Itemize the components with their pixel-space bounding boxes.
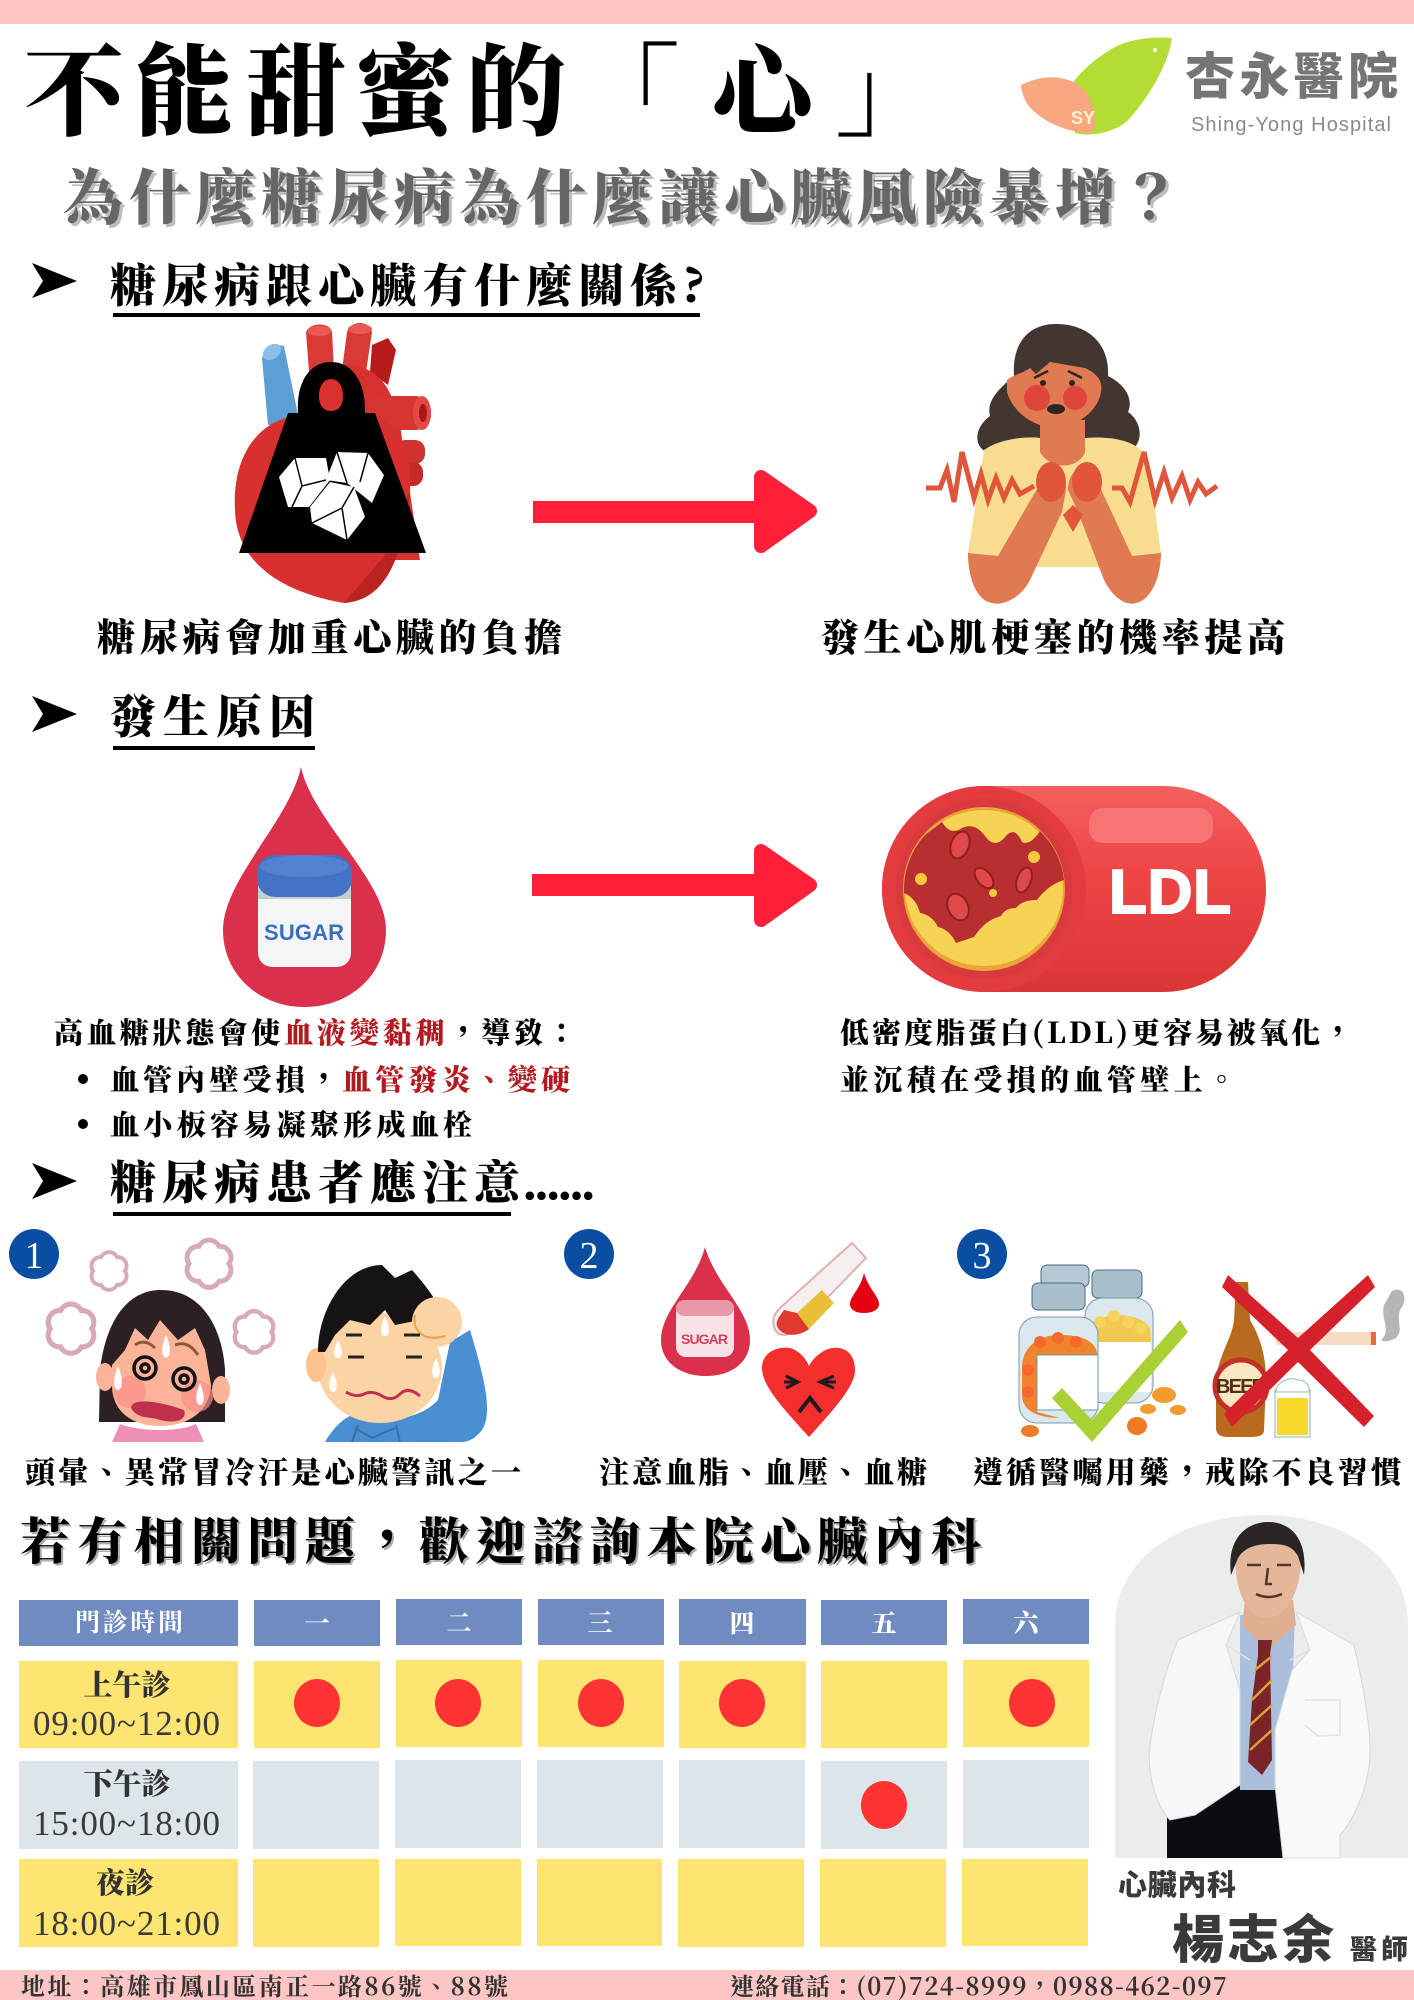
- number badge 1: 1: [24, 1235, 44, 1277]
- text block: high blood sugar: 血管內壁受損，血管發炎、變硬: [110, 1058, 570, 1099]
- logo: Shing-Yong Hospital: Shing-Yong Hospital: [1191, 114, 1391, 136]
- table header: 一: [304, 1604, 330, 1640]
- table header: 五: [871, 1604, 897, 1640]
- icon: no beer, no cigarette: BEER: [1216, 1376, 1267, 1398]
- subtitle with shadow: 為什麼糖尿病為什麼讓心臟風險暴增？: [63, 151, 1181, 237]
- weight: [298, 362, 365, 413]
- afternoon row: 15:00~18:00: [33, 1804, 220, 1843]
- evening row: [19, 1859, 1088, 1947]
- icon: heart with sugar weight: [235, 323, 431, 603]
- icon: blood drop with jar (small): [661, 1247, 750, 1376]
- trousers: [1167, 1780, 1340, 1858]
- morning row: [19, 1660, 1089, 1748]
- logo: Shing-Yong Hospital: [1021, 38, 1398, 136]
- caption 2: 注意血脂、血壓、血糖: [599, 1448, 927, 1492]
- text block: high blood sugar: [54, 1011, 576, 1144]
- text block: high blood sugar: 血小板容易凝聚形成血栓: [110, 1103, 472, 1144]
- icon: sweating boy: [306, 1265, 487, 1442]
- icon: woman with chest pain: [926, 324, 1217, 604]
- table header: 門診時間: [75, 1603, 183, 1639]
- clinic timetable: [19, 1599, 1089, 1947]
- section 3 heading: ......: [522, 1147, 596, 1213]
- table header: 二: [446, 1604, 472, 1640]
- number badge 2: [564, 1229, 614, 1279]
- text block: LDL: 並沉積在受損的血管壁上。: [840, 1058, 1236, 1099]
- section 1 heading: 糖尿病跟心臟有什麼關係?: [110, 250, 705, 316]
- table header: 六: [1013, 1604, 1041, 1640]
- footer band: [0, 1970, 1414, 2000]
- doctor department: 心臟內科: [1118, 1869, 1236, 1902]
- arrow 2: [532, 851, 810, 920]
- section 2 heading: 發生原因: [110, 681, 315, 747]
- icon: blood drop with sugar jar: SUGAR: [264, 920, 345, 945]
- table header: 四: [729, 1604, 755, 1640]
- icon: LDL artery: LDL: [1109, 858, 1231, 927]
- number badge 3: 3: [972, 1235, 992, 1277]
- morning row: 上午診: [83, 1663, 171, 1704]
- doctor photo panel: [1115, 1515, 1408, 1858]
- number badge 2: 2: [580, 1235, 598, 1277]
- icon: test tube: [773, 1243, 879, 1335]
- top pink band: [0, 0, 1414, 24]
- logo: Shing-Yong Hospital: SY: [1071, 108, 1095, 128]
- doctor title: 醫師: [1350, 1935, 1408, 1965]
- icon: LDL artery: [882, 786, 1266, 992]
- coat: [1149, 1612, 1240, 1820]
- neck and face: [1242, 1600, 1296, 1650]
- icon: no beer, no cigarette: [1215, 1275, 1404, 1437]
- icon: blood drop with jar (small): SUGAR: [681, 1331, 728, 1347]
- icon: unhappy heart: [762, 1348, 855, 1437]
- morning row: 09:00~12:00: [33, 1704, 220, 1743]
- arrow 1: [533, 477, 810, 546]
- section 2 heading: [32, 681, 315, 750]
- caption: heart attack risk: 發生心肌梗塞的機率提高: [821, 607, 1285, 662]
- section 3 heading: 糖尿病患者應注意: [110, 1147, 524, 1213]
- icon: blood drop with sugar jar: [223, 767, 386, 1007]
- logo: Shing-Yong Hospital: 杏永醫院: [1185, 49, 1398, 105]
- afternoon row: 下午診: [83, 1762, 171, 1803]
- icon: dizzy girl: [48, 1240, 273, 1442]
- text block: LDL: [840, 1011, 1352, 1099]
- section 3 heading: [32, 1147, 596, 1216]
- caption 1: 頭暈、異常冒冷汗是心臟警訊之一: [25, 1448, 521, 1492]
- caption: heart burden: 糖尿病會加重心臟的負擔: [97, 607, 562, 662]
- shirt: [1240, 1615, 1295, 1790]
- evening row: 18:00~21:00: [33, 1904, 220, 1943]
- text block: LDL: 低密度脂蛋白(LDL)更容易被氧化，: [840, 1011, 1352, 1052]
- doctor name: 楊志余: [1172, 1912, 1334, 1970]
- tie: [1248, 1640, 1272, 1775]
- icon: medicine bottles with check: [1019, 1265, 1188, 1442]
- caption 3: 遵循醫囑用藥，戒除不良習慣: [973, 1448, 1406, 1492]
- consultation heading: 若有相關問題，歡迎諮詢本院心臟內科: [20, 1502, 981, 1574]
- number badge 1: [9, 1229, 59, 1279]
- table header: [19, 1599, 1089, 1646]
- afternoon row: [19, 1760, 1089, 1849]
- text block: high blood sugar: 高血糖狀態會使血液變黏稠，導致：: [54, 1011, 576, 1052]
- title: 不能甜蜜的「心」: [24, 12, 936, 156]
- evening row: 夜診: [96, 1861, 154, 1902]
- number badge 3: [957, 1229, 1007, 1279]
- table header: 三: [587, 1604, 613, 1640]
